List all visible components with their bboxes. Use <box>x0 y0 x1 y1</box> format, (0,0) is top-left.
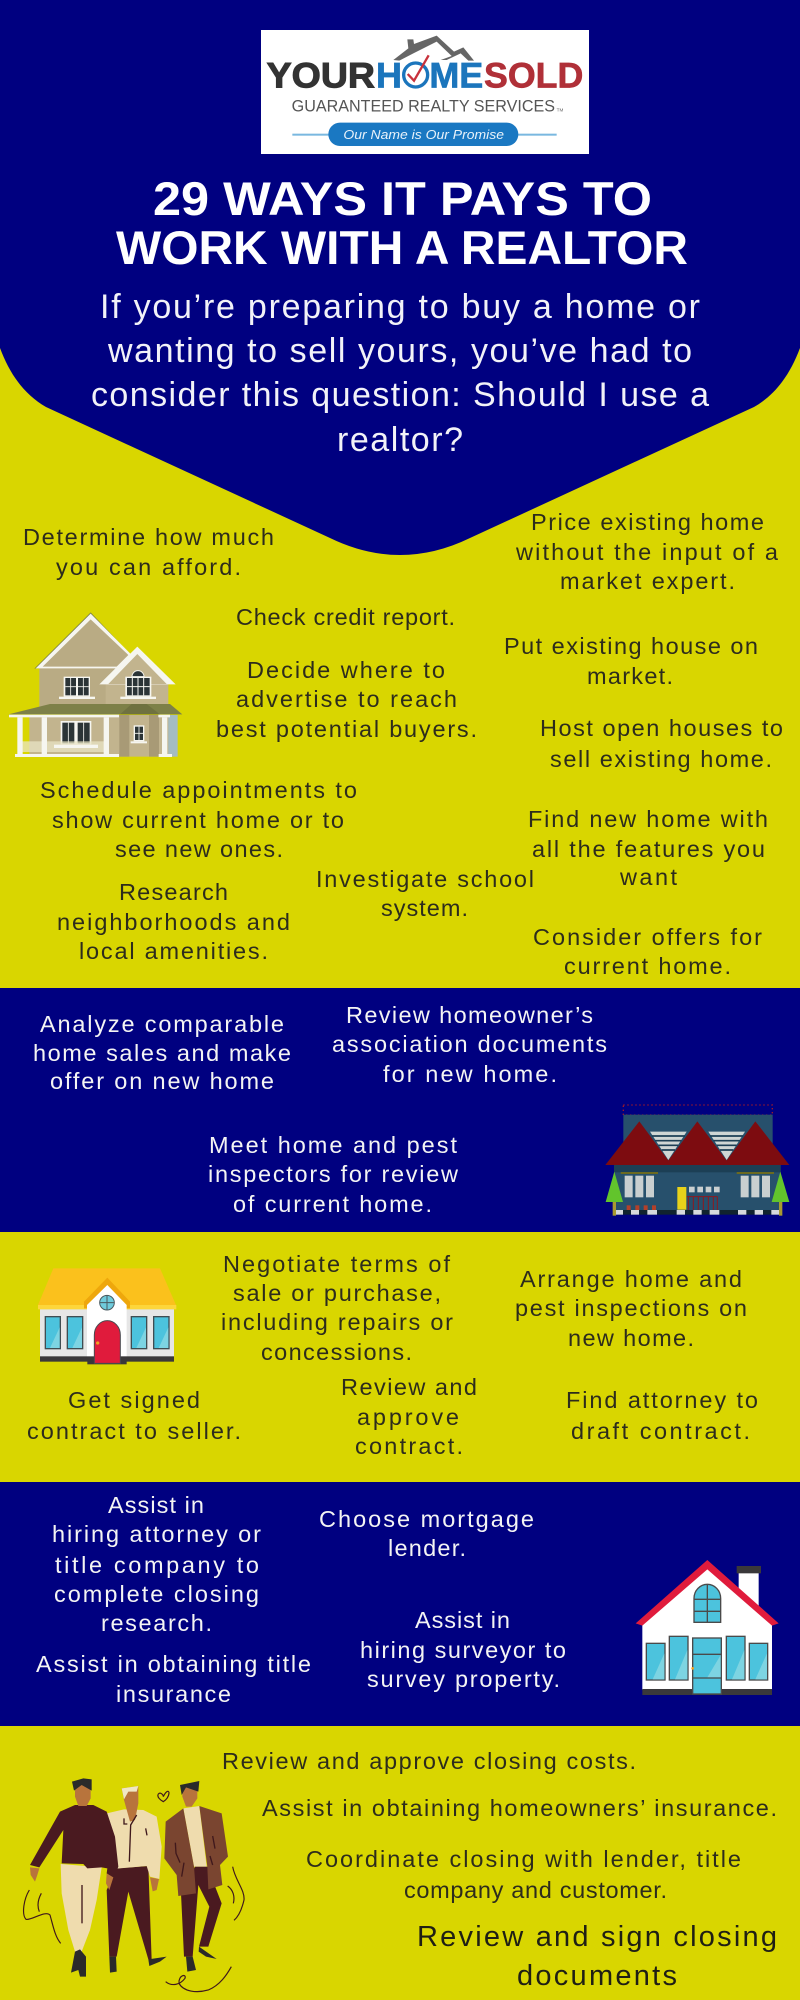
text block: decide where to advertise: best potential buyers. <box>216 716 477 742</box>
text block: price existing home: without the input of a <box>515 539 779 565</box>
text block: review and approve contract: contract. <box>355 1433 463 1459</box>
text block: hiring surveyor: hiring surveyor to <box>360 1637 566 1663</box>
text block: hiring surveyor: survey property. <box>367 1666 560 1692</box>
text block: meet inspectors <box>208 1132 459 1217</box>
text block: analyze comparable sales: Analyze comparable <box>40 1011 284 1037</box>
decorative squiggles and heart <box>24 1791 244 1992</box>
illustration: yellow-roof house <box>38 1268 176 1364</box>
title: 29 WAYS IT PAYS TO <box>153 172 652 225</box>
text block: hiring attorney: Assist in <box>108 1492 204 1518</box>
logo: TM <box>557 108 564 113</box>
text block: review association documents: association documents <box>332 1031 607 1057</box>
logo: SOLD <box>484 57 583 96</box>
text block: hiring attorney: research. <box>101 1610 212 1636</box>
text block: put existing house on market <box>504 633 758 689</box>
subtitle: consider this question: Should I use a <box>91 376 709 414</box>
text block: negotiate terms: including repairs or <box>221 1309 453 1335</box>
text block: determine how much: you can afford. <box>56 554 241 580</box>
text block: coordinate closing: Coordinate closing with lender, title <box>306 1846 741 1872</box>
text block: arrange inspections: pest inspections on <box>515 1295 747 1321</box>
text block: find attorney: draft contract. <box>571 1418 750 1444</box>
text block: meet inspectors: of current home. <box>233 1191 432 1217</box>
man on the right <box>164 1781 228 1972</box>
text block: arrange inspections: new home. <box>568 1325 694 1351</box>
text block: host open houses: Host open houses to <box>540 715 783 741</box>
text block: determine how much <box>23 524 274 580</box>
text block: schedule appointments: show current home or to <box>52 807 344 833</box>
text block: hiring attorney <box>52 1492 261 1636</box>
text block: investigate school system <box>316 866 534 921</box>
text block: hiring attorney: complete closing <box>54 1581 259 1607</box>
logo: Our Name is Our Promise <box>343 127 504 142</box>
illustration: teal house with red roofs <box>605 1105 789 1216</box>
text block: choose mortgage lender: Choose mortgage <box>319 1506 534 1532</box>
text block: hiring surveyor <box>360 1607 566 1692</box>
text block: title insurance: insurance <box>116 1681 231 1707</box>
text block: analyze comparable sales: offer on new home <box>50 1068 274 1094</box>
text block: choose mortgage lender <box>319 1506 534 1561</box>
text block: review closing costs: Review and approve closing costs. <box>222 1748 636 1774</box>
text block: find new home <box>528 806 768 890</box>
text block: investigate school system: Investigate school <box>316 866 534 892</box>
text block: hiring surveyor: Assist in <box>415 1607 510 1633</box>
text block: schedule appointments: see new ones. <box>115 836 283 862</box>
text block: negotiate terms: concessions. <box>261 1339 412 1365</box>
text block: review and approve contract: approve <box>357 1404 459 1430</box>
text block: meet inspectors: Meet home and pest <box>209 1132 457 1158</box>
text block: coordinate closing <box>306 1846 741 1903</box>
text block: find attorney <box>566 1387 758 1444</box>
man on the left <box>30 1778 118 1977</box>
text block: research neighborhoods: local amenities. <box>79 938 268 964</box>
text block: price existing home <box>515 509 779 594</box>
text block: title insurance <box>36 1651 311 1707</box>
logo: ME <box>429 57 483 96</box>
text block: schedule appointments: Schedule appointments to <box>40 777 357 803</box>
text block: decide where to advertise: Decide where to <box>247 657 445 683</box>
man in the middle <box>102 1786 167 1973</box>
text block: negotiate terms: Negotiate terms of <box>223 1251 450 1277</box>
subtitle: If you’re preparing to buy a home or <box>100 288 700 326</box>
text block: hiring attorney: hiring attorney or <box>52 1521 261 1547</box>
text block: review and approve contract: Review and <box>341 1374 477 1400</box>
text block: negotiate terms <box>221 1251 453 1365</box>
panel: navy band two <box>0 1482 800 1726</box>
text block: negotiate terms: sale or purchase, <box>233 1280 441 1306</box>
text block: put existing house on market: Put existing house on <box>504 633 758 659</box>
text block: investigate school system: system. <box>381 895 468 921</box>
text block: find attorney: Find attorney to <box>566 1387 758 1413</box>
text block: get signed contract: Get signed <box>68 1387 200 1413</box>
text block: review and sign closing documents <box>417 1921 777 1992</box>
text block: find new home: want <box>619 864 677 890</box>
panel: navy band one <box>0 988 800 1232</box>
text block: get signed contract: contract to seller. <box>27 1418 241 1444</box>
text block: find new home: all the features you <box>532 836 765 862</box>
logo <box>261 30 589 154</box>
logo: YOUR <box>267 57 375 96</box>
text block: review and approve contract <box>341 1374 477 1459</box>
text block: schedule appointments <box>40 777 357 862</box>
text block: arrange inspections <box>515 1266 747 1351</box>
text block: coordinate closing: company and customer. <box>404 1877 667 1903</box>
text block: consider offers: Consider offers for <box>533 924 762 950</box>
text block: check credit report: Check credit report. <box>236 604 455 630</box>
text block: put existing house on market: market. <box>587 663 673 689</box>
subtitle: realtor? <box>337 421 463 459</box>
logo: H <box>376 57 402 96</box>
text block: arrange inspections: Arrange home and <box>520 1266 742 1292</box>
text block: review and sign closing documents: documents <box>517 1960 677 1992</box>
text block: consider offers: current home. <box>564 953 731 979</box>
title <box>116 172 688 274</box>
subtitle <box>91 288 709 459</box>
subtitle: wanting to sell yours, you’ve had to <box>107 332 692 370</box>
text block: review association documents <box>332 1002 607 1087</box>
text block: choose mortgage lender: lender. <box>388 1535 466 1561</box>
illustration: beige two-storey house <box>8 612 182 757</box>
text block: decide where to advertise <box>216 657 477 742</box>
text block: title insurance: Assist in obtaining title <box>36 1651 311 1677</box>
text block: price existing home: market expert. <box>560 568 735 594</box>
text block: analyze comparable sales <box>33 1011 291 1094</box>
text block: hiring attorney: title company to <box>55 1552 259 1578</box>
logo: GUARANTEED REALTY SERVICES <box>292 97 555 116</box>
text block: homeowners insurance: Assist in obtaining homeowners’ insurance. <box>262 1795 777 1821</box>
text block: determine how much: Determine how much <box>23 524 274 550</box>
text block: review association documents: Review homeowner’s <box>346 1002 593 1028</box>
text block: price existing home: Price existing home <box>531 509 764 535</box>
title: WORK WITH A REALTOR <box>116 221 688 274</box>
text block: research neighborhoods <box>57 879 290 964</box>
panel: header shield <box>0 0 800 555</box>
illustration: white house with red roof <box>636 1560 779 1695</box>
text block: host open houses <box>540 715 783 772</box>
illustration: three men walking <box>24 1778 244 1992</box>
text block: analyze comparable sales: home sales and make <box>33 1040 291 1066</box>
text block: research neighborhoods: neighborhoods and <box>57 909 290 935</box>
text block: research neighborhoods: Research <box>119 879 228 905</box>
text block: find new home: Find new home with <box>528 806 768 832</box>
text block: consider offers <box>533 924 762 979</box>
text block: decide where to advertise: advertise to reach <box>236 686 457 712</box>
text block: review association documents: for new home. <box>383 1061 557 1087</box>
text block: get signed contract <box>27 1387 241 1444</box>
text block: host open houses: sell existing home. <box>550 746 772 772</box>
text block: meet inspectors: inspectors for review <box>208 1161 459 1187</box>
text block: review and sign closing documents: Review and sign closing <box>417 1921 777 1953</box>
